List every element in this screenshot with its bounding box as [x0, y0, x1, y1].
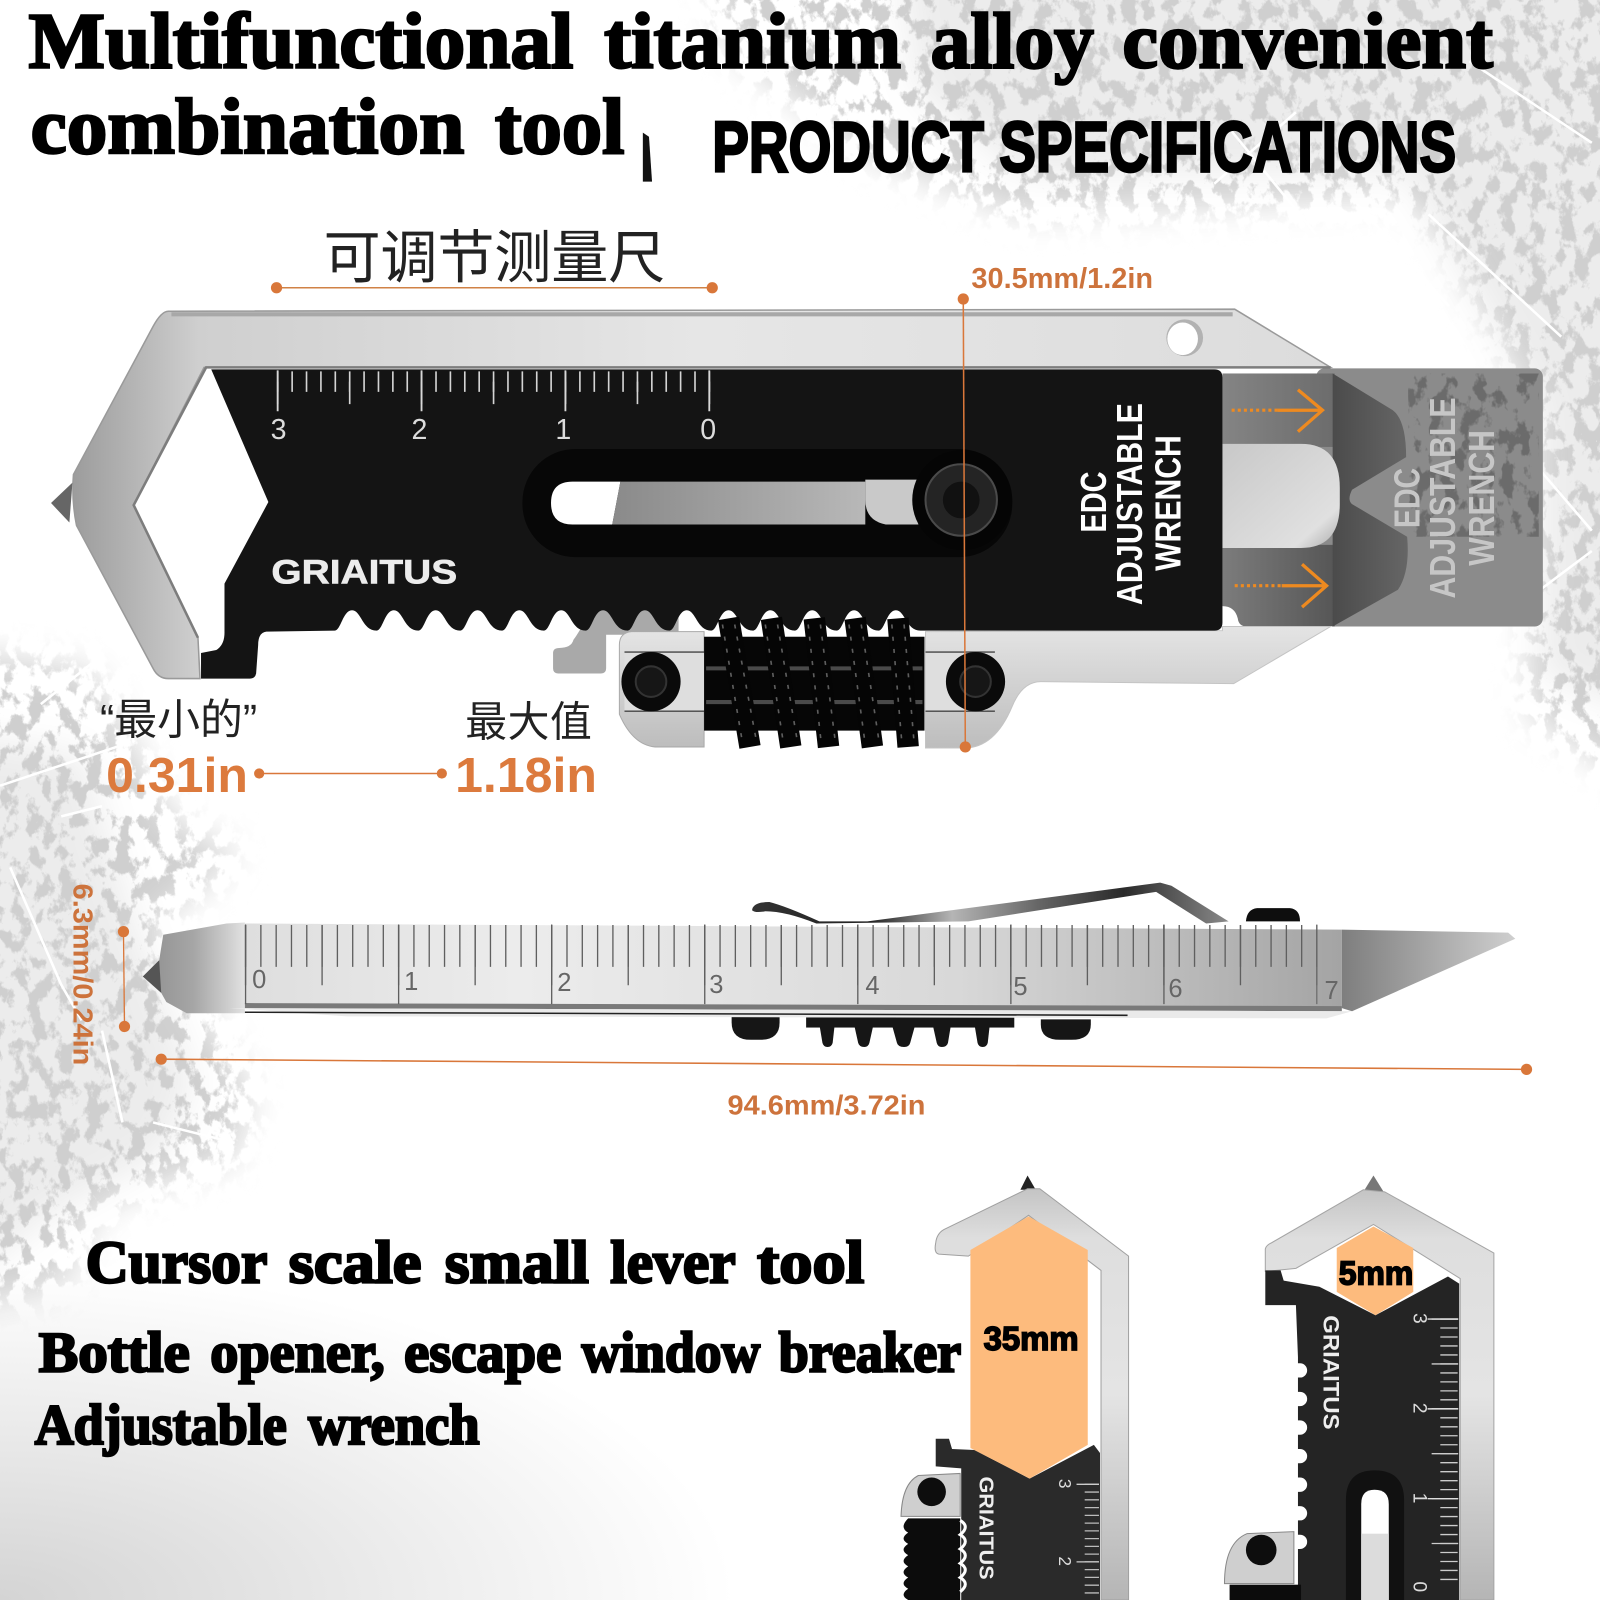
callout: minimum and maximum opening [100, 697, 597, 803]
ruler: 2 [1408, 1403, 1430, 1414]
dimension: length 94.6mm: 94.6mm/3.72in [728, 1089, 926, 1120]
tool at minimum opening 5mm [1224, 1176, 1494, 1600]
orange highlight [1337, 1227, 1413, 1315]
pocket clip [752, 883, 1300, 923]
black slider [936, 1439, 1100, 1600]
tip [1363, 1176, 1384, 1192]
arrow: jaw direction lower [1235, 564, 1327, 607]
silver frame [1265, 1190, 1494, 1600]
ruler scale: 1 [555, 414, 571, 446]
title [29, 0, 1493, 182]
product label [1074, 403, 1189, 605]
dimension: width 30.5mm [958, 263, 1153, 753]
arrow: jaw direction upper [1232, 390, 1322, 432]
slot and screw [522, 449, 1012, 557]
feature list: Adjustable [35, 1394, 287, 1457]
top view of adjustable wrench [51, 309, 1543, 748]
logo: GRIAITUS [975, 1477, 997, 1580]
side ruler numbers: 3 [709, 971, 723, 999]
size label: 5mm [1339, 1256, 1413, 1293]
feature list: escape [404, 1321, 561, 1384]
dimension: thickness 6.3mm: 6.3mm/0.24in [67, 884, 98, 1065]
feature list: wrench [308, 1394, 480, 1457]
side ruler numbers: 2 [557, 969, 571, 997]
feature list: Bottle [39, 1321, 190, 1384]
tool at maximum opening 35mm [901, 1176, 1129, 1600]
dimension: length 94.6mm [156, 1054, 1532, 1120]
knob [901, 1473, 965, 1600]
side ruler numbers: 4 [865, 972, 880, 1000]
knurled thumbwheel [704, 618, 924, 747]
under parts: screws and wheel [732, 1013, 1091, 1047]
ghost hook [553, 608, 679, 673]
side ruler numbers: 7 [1325, 977, 1339, 1005]
knob [1224, 1532, 1301, 1600]
callout: minimum and maximum opening: 1.18in [455, 749, 597, 803]
ruler: 3 [1055, 1479, 1075, 1488]
feature list: tool [757, 1230, 864, 1297]
product label: EDC [1074, 471, 1114, 533]
silver body frame [73, 309, 1331, 748]
ruler scale [271, 382, 716, 446]
slot [1346, 1470, 1404, 1600]
screws [621, 652, 1005, 711]
black slider [1265, 1270, 1459, 1600]
callout: minimum and maximum opening: “最小的” [100, 697, 257, 745]
side ruler numbers: 0 [252, 966, 266, 994]
scalloped teeth [1292, 1363, 1307, 1549]
orange highlight [970, 1216, 1088, 1479]
title: combination [31, 83, 464, 171]
ruler [1408, 1313, 1449, 1592]
ruler: 1 [1408, 1493, 1430, 1503]
dimension: width 30.5mm: 30.5mm/1.2in [971, 263, 1153, 295]
side ruler scale [245, 946, 1317, 964]
silver frame [935, 1189, 1129, 1600]
window breaker tip [51, 483, 72, 522]
ruler scale: 3 [271, 414, 287, 446]
feature list: lever [610, 1230, 736, 1297]
sliding jaw ghost panel [1222, 368, 1543, 627]
side ruler numbers [252, 966, 1339, 1005]
feature list: scale [289, 1230, 421, 1297]
black slider plate with scalloped teeth [201, 369, 1222, 679]
ruler: 3 [1408, 1313, 1430, 1324]
ruler [1055, 1479, 1092, 1600]
logo: GRIAITUS [1318, 1315, 1343, 1430]
side ruler numbers: 5 [1013, 973, 1028, 1001]
ruler: 2 [1055, 1556, 1075, 1566]
product label: ADJUSTABLE [1110, 403, 1150, 605]
size label: 35mm [984, 1321, 1079, 1358]
side ruler numbers: 1 [404, 968, 418, 996]
feature list: opener, [210, 1321, 385, 1384]
side ruler numbers: 6 [1168, 975, 1183, 1003]
feature list: breaker [779, 1321, 961, 1384]
title: tool [495, 83, 624, 171]
ruler: 0 [1408, 1581, 1430, 1592]
product label: WRENCH [1149, 435, 1189, 571]
ruler scale: 0 [700, 414, 716, 446]
sliding jaw ghost panel: ADJUSTABLE [1423, 397, 1463, 598]
feature list [35, 1230, 961, 1457]
feature list: Cursor [86, 1230, 267, 1297]
callout: minimum and maximum opening: 最大值 [465, 699, 592, 746]
feature list: small [445, 1230, 589, 1297]
tip [1020, 1176, 1036, 1190]
callout: minimum and maximum opening: 0.31in [106, 749, 248, 803]
callout: adjustable measuring ruler: 可调节测量尺 [323, 227, 665, 291]
sliding jaw ghost panel: EDC [1387, 468, 1427, 528]
side body [143, 922, 245, 1013]
brand logo: GRIAITUS [271, 554, 457, 592]
side view of wrench [143, 883, 1515, 1047]
ruler scale: 2 [411, 414, 427, 446]
dimension: thickness 6.3mm [67, 884, 130, 1065]
feature list: window [582, 1321, 760, 1384]
sliding jaw ghost panel: WRENCH [1462, 430, 1502, 566]
